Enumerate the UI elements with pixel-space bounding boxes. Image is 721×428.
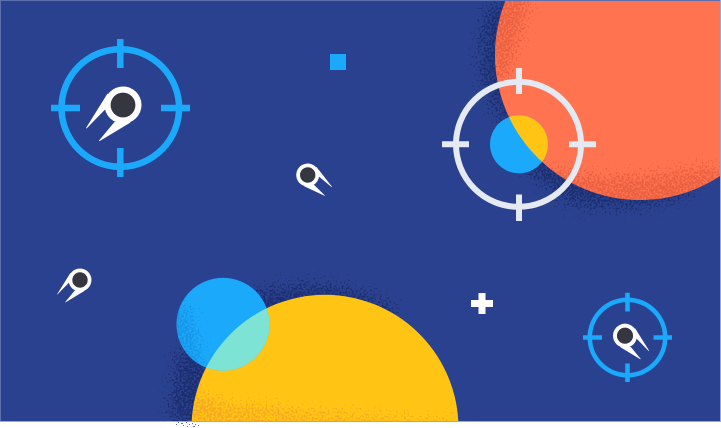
comet: inside small target (613, 324, 649, 359)
stipple shadow: orange planet (476, 0, 700, 212)
plus sign: white (471, 293, 493, 314)
stipple shading: orange planet (495, 1, 720, 200)
stipple spill below panel (176, 422, 199, 427)
overlap: blue and yellow planets (206, 308, 270, 371)
planet: yellow (192, 295, 458, 421)
planet: blue (176, 278, 270, 371)
target: white crosshair with planet (442, 68, 596, 221)
comet: centre (295, 161, 333, 198)
stipple shading: yellow planet (192, 384, 456, 421)
square: blue (330, 54, 346, 70)
target: large blue crosshair (51, 39, 190, 177)
comet: lower left (57, 269, 91, 302)
target: small blue crosshair (583, 293, 672, 382)
planet: orange (495, 0, 721, 200)
comet: inside large target (86, 86, 142, 141)
stipple shadow: yellow planet (164, 280, 400, 428)
stipple shading: blue planet (176, 292, 270, 371)
